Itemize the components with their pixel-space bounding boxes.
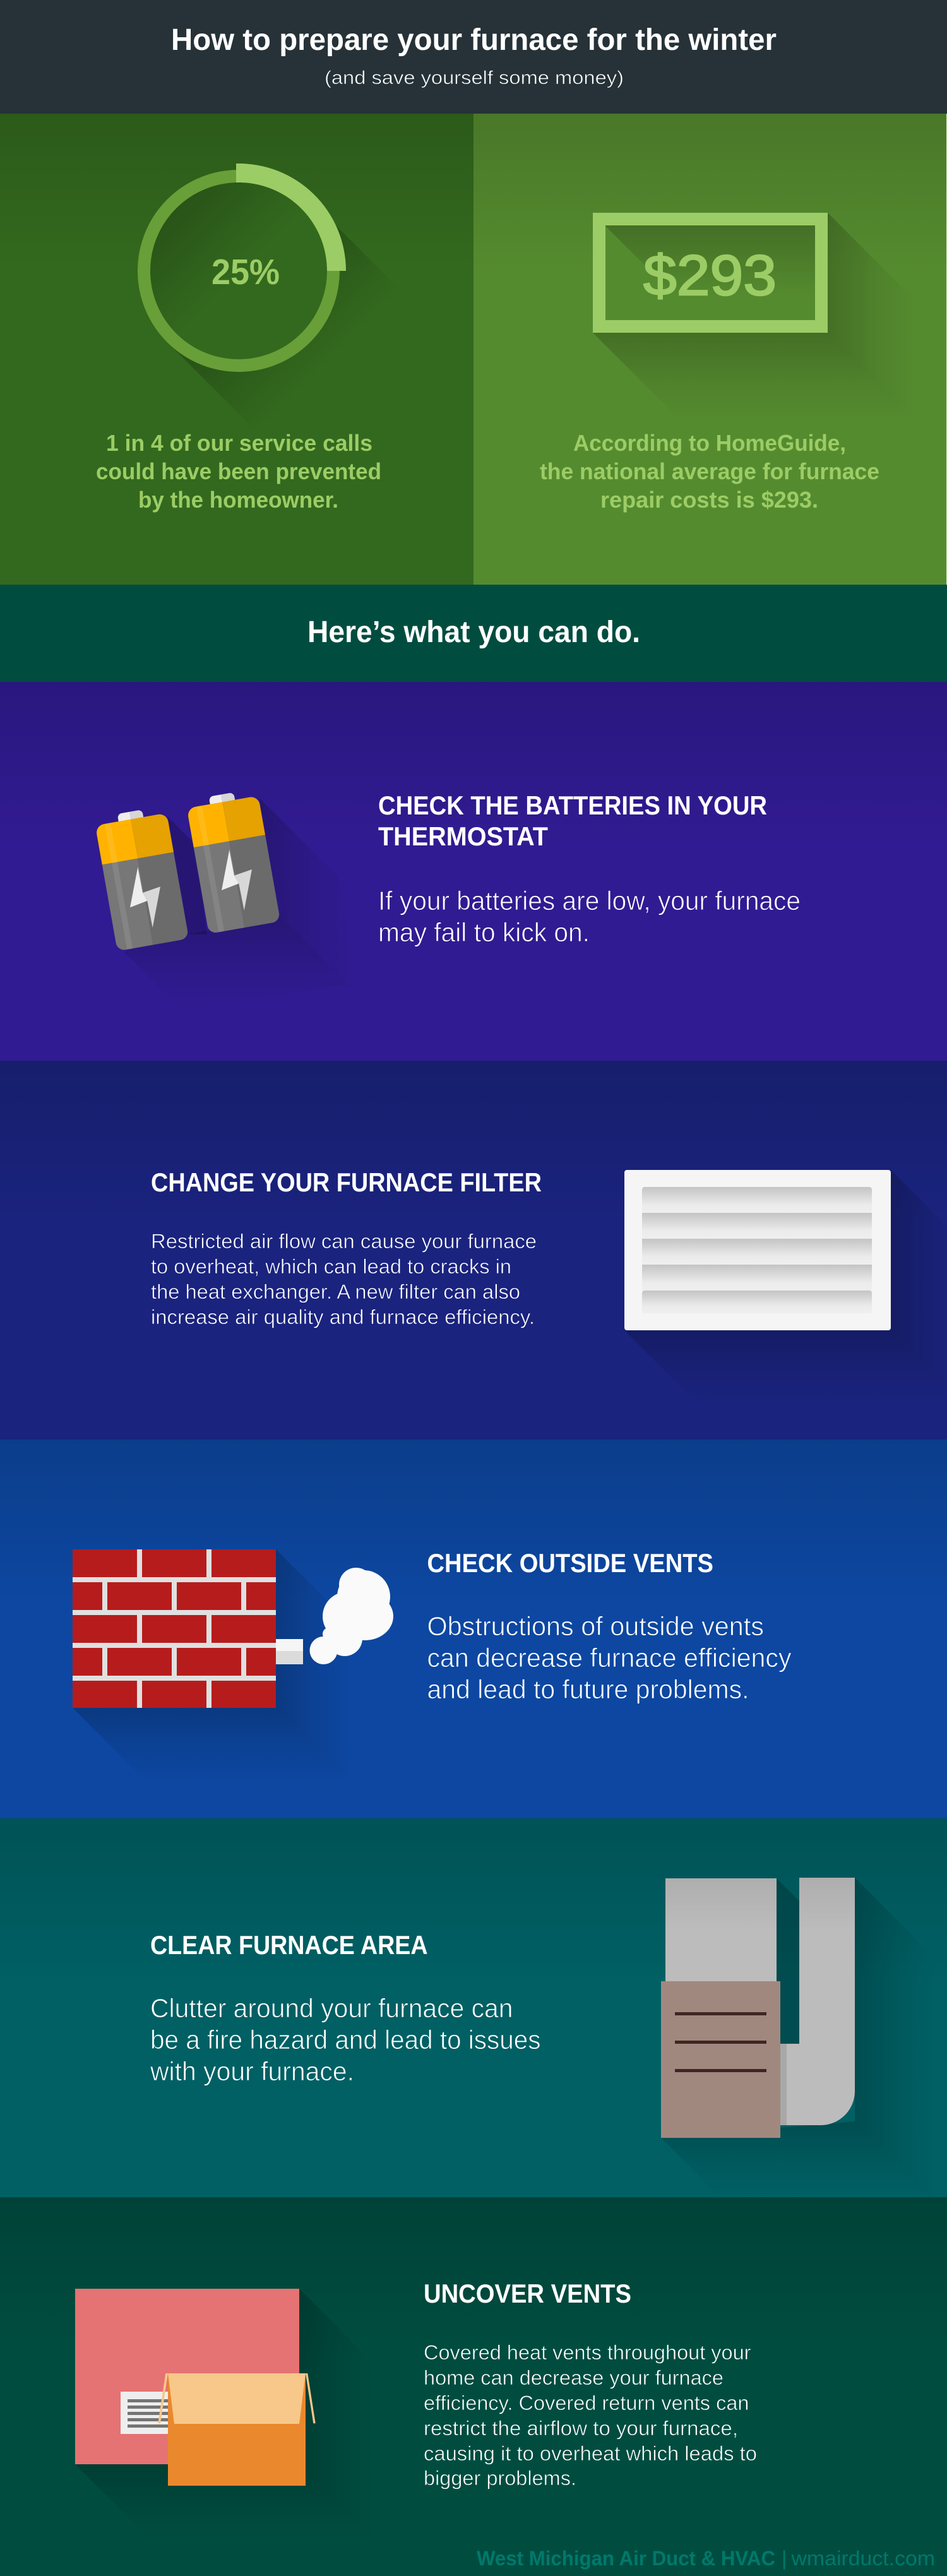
icon: money box shadow [593, 213, 916, 421]
icon: brick wall [73, 1549, 276, 1708]
header band [0, 0, 947, 114]
text: clear furnace area: Clutter around your furnace can [150, 1993, 513, 2023]
heading: check the batteries: CHECK THE BATTERIES IN YOUR [378, 790, 767, 820]
icon: pink wall [75, 2289, 299, 2464]
heading: uncover vents: UNCOVER VENTS [424, 2279, 631, 2308]
panel: check the batteries [0, 682, 947, 1061]
cost description: According to HomeGuide, [573, 430, 846, 456]
cost description: repair costs is $293. [600, 487, 818, 513]
heading: check the batteries [378, 790, 767, 851]
text: change your furnace filter: to overheat, which can lead to cracks in [151, 1255, 511, 1278]
icon: open cardboard box [158, 2373, 316, 2486]
text: check the batteries: may fail to kick on. [378, 917, 590, 947]
text: check outside vents: and lead to future problems. [427, 1674, 749, 1704]
statistic description: could have been prevented [96, 458, 381, 484]
panel: average repair cost [474, 114, 947, 585]
text: check the batteries: If your batteries are low, your furnace [378, 886, 801, 915]
icon: wall shadow [75, 2289, 381, 2546]
panel: 25 percent statistic [0, 114, 474, 585]
title: How to prepare your furnace for the winter [171, 23, 777, 57]
footer credit: | [782, 2547, 787, 2570]
subtitle: (and save yourself some money) [325, 68, 624, 88]
icon: wall shadow [73, 1549, 352, 1784]
icon: money box [599, 219, 821, 326]
icon: filter shadow [624, 1170, 947, 1406]
section heading band [0, 585, 947, 682]
text: uncover vents: restrict the airflow to your furnace, [424, 2417, 738, 2440]
icon: furnace cabinet [661, 1981, 780, 2138]
section heading: Here’s what you can do. [307, 616, 640, 649]
text: change your furnace filter: the heat exchanger. A new filter can also [151, 1280, 520, 1303]
text: change your furnace filter: increase air quality and furnace efficiency. [151, 1306, 535, 1328]
text: uncover vents: home can decrease your furnace [424, 2366, 724, 2389]
text: check outside vents: can decrease furnace efficiency [427, 1643, 792, 1673]
icon: vent pipe [276, 1639, 303, 1664]
text: change your furnace filter [151, 1230, 537, 1328]
text: check the batteries [378, 886, 801, 947]
icon: smoke cloud [309, 1568, 393, 1664]
text: uncover vents [424, 2341, 757, 2490]
panel: uncover vents [0, 2197, 947, 2576]
text: clear furnace area: with your furnace. [150, 2056, 354, 2086]
text: clear furnace area: be a fire hazard and lead to issues [150, 2025, 540, 2054]
icon: furnace shadow [661, 1878, 937, 2203]
text: uncover vents: causing it to overheat which leads to [424, 2442, 757, 2465]
cost value: $293 [643, 244, 777, 307]
icon: batteries shadow [123, 797, 359, 1008]
text: check outside vents: Obstructions of outside vents [427, 1611, 764, 1641]
text: check outside vents [427, 1611, 792, 1704]
footer credit: West Michigan Air Duct & HVAC [477, 2547, 775, 2570]
icon: right battery [186, 788, 280, 934]
icon: furnace filter [624, 1170, 891, 1330]
statistic description: 1 in 4 of our service calls [106, 430, 372, 456]
text: uncover vents: bigger problems. [424, 2467, 576, 2490]
statistic description [96, 430, 381, 513]
icon: ring shadow [167, 200, 398, 431]
statistic description: by the homeowner. [138, 487, 338, 513]
panel: check outside vents [0, 1440, 947, 1818]
cost description [540, 430, 879, 513]
footer credit [477, 2547, 935, 2570]
percentage value: 25% [211, 252, 280, 292]
heading: clear furnace area: CLEAR FURNACE AREA [150, 1930, 428, 1960]
panel: change your furnace filter [0, 1061, 947, 1440]
icon: progress ring [144, 164, 346, 366]
icon: furnace ducts [665, 1878, 855, 2125]
panel: clear furnace area [0, 1818, 947, 2203]
heading: check the batteries: THERMOSTAT [378, 821, 548, 851]
text: change your furnace filter: Restricted air flow can cause your furnace [151, 1230, 537, 1253]
icon: floor vent [121, 2392, 168, 2434]
text: uncover vents: Covered heat vents throughout your [424, 2341, 751, 2364]
footer credit: wmairduct.com [790, 2547, 935, 2570]
heading: change your furnace filter: CHANGE YOUR FURNACE FILTER [151, 1167, 542, 1197]
text: clear furnace area [150, 1993, 540, 2086]
text: uncover vents: efficiency. Covered return vents can [424, 2392, 749, 2414]
icon: left battery [94, 806, 189, 951]
heading: check outside vents: CHECK OUTSIDE VENTS [427, 1548, 713, 1578]
cost description: the national average for furnace [540, 458, 879, 484]
